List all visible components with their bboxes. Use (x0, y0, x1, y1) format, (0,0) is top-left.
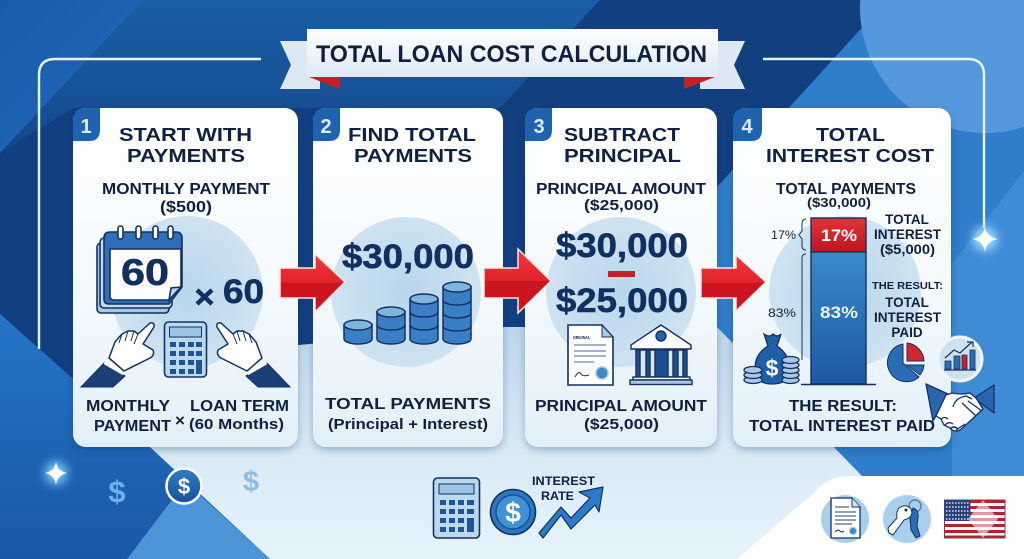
icon: pie chart (888, 343, 924, 382)
formula: LOAN TERM (190, 398, 289, 415)
heading 4: TOTAL (816, 124, 885, 145)
total payments label: TOTAL PAYMENTS (325, 396, 491, 413)
icon: keys (883, 495, 931, 543)
principal amount label: PRINCIPAL AMOUNT (535, 398, 708, 415)
icon: calendar: 60 (121, 252, 169, 293)
heading 4: INTEREST COST (766, 145, 935, 166)
result text: THE RESULT: (789, 398, 897, 415)
heading 4 (766, 124, 935, 166)
stacked bar: 83% (820, 303, 858, 322)
icon: bank (630, 325, 692, 384)
formula: (60 Months) (189, 416, 284, 433)
heading 2 (348, 124, 476, 166)
badge 4 (733, 108, 762, 141)
principal label: ($25,000) (584, 197, 659, 214)
formula: MONTHLY (86, 398, 171, 415)
stacked bar (768, 218, 876, 384)
badge 2: 2 (320, 116, 332, 138)
sparkle right (972, 227, 998, 252)
panel: step 4 (733, 108, 951, 447)
frame line right (763, 59, 984, 228)
result side label: TOTAL (885, 295, 929, 310)
principal amount label: ($25,000) (584, 416, 659, 433)
icon: document (568, 325, 613, 385)
monthly payment label: MONTHLY PAYMENT (102, 181, 271, 198)
icon: bottom coin (490, 490, 536, 534)
total interest label: ($5,000) (880, 242, 935, 257)
times 60 (197, 273, 264, 311)
icon: left hand (81, 323, 154, 387)
result side label: PAID (891, 325, 923, 340)
icon: calculator (164, 322, 206, 377)
interest rate arrow: RATE (541, 489, 574, 503)
heading 1: PAYMENTS (127, 145, 245, 166)
badge 1: 1 (80, 116, 92, 138)
badge 4: 4 (741, 116, 753, 138)
panel: step 3 (525, 108, 717, 447)
heading 1: START WITH (119, 124, 252, 145)
icon: document: ORIGINAL (573, 335, 590, 340)
badge 3: 3 (533, 116, 545, 138)
result side label: INTEREST (874, 310, 942, 325)
monthly payment label: ($500) (160, 199, 212, 216)
panel: step 2 (313, 108, 503, 447)
total interest label: TOTAL (885, 212, 929, 227)
arrow 3 (701, 255, 766, 311)
badge 1 (73, 108, 100, 141)
times 60: 60 (223, 273, 264, 311)
dollar sign pale: $ (243, 466, 259, 498)
heading 1 (119, 124, 252, 166)
subtraction: $30,000 (556, 227, 688, 265)
dollar coin: $ (178, 474, 190, 499)
total payments: ($30,000) (807, 195, 871, 210)
heading 2: FIND TOTAL (348, 124, 476, 145)
title banner (280, 29, 745, 89)
subtraction (556, 227, 688, 320)
heading 3: PRINCIPAL (564, 145, 681, 166)
total interest label: INTEREST (874, 227, 942, 242)
icon: calendar (97, 226, 182, 313)
icon: US flag (944, 500, 1005, 538)
principal amount label (535, 398, 708, 433)
total interest label (874, 212, 942, 257)
heading 3 (564, 124, 681, 166)
total payments: TOTAL PAYMENTS (776, 181, 916, 198)
icon: bottom calculator (434, 478, 480, 538)
icon: money bag (744, 334, 799, 384)
dollar coin (166, 468, 202, 504)
formula: PAYMENT (94, 418, 172, 435)
badge 2 (313, 108, 340, 141)
total payments label: (Principal + Interest) (328, 416, 488, 433)
heading 2: PAYMENTS (354, 145, 472, 166)
icon: coin stacks (344, 282, 471, 344)
dollar sign blue: $ (108, 474, 126, 509)
icon: growth chart badge (938, 337, 982, 381)
icon: handshake (926, 384, 994, 431)
subtraction: $25,000 (556, 282, 688, 320)
title text: TOTAL LOAN COST CALCULATION (316, 41, 707, 68)
stacked bar: 17% (821, 226, 857, 245)
total amount: $30,000 (342, 238, 474, 276)
formula: × (175, 411, 185, 430)
icon: money bag: $ (766, 355, 779, 381)
interest rate arrow (532, 474, 603, 538)
interest rate arrow: INTEREST (532, 474, 596, 488)
icon: bottom coin: $ (505, 497, 521, 528)
arrow 1 (280, 254, 345, 312)
total payments label (325, 396, 491, 433)
frame line left (39, 59, 261, 349)
result text: TOTAL INTEREST PAID (749, 418, 935, 435)
badge 3 (525, 108, 552, 141)
monthly payment label (102, 181, 271, 216)
stacked bar: 83% (768, 306, 796, 320)
result side label (872, 280, 943, 340)
principal label: PRINCIPAL AMOUNT (536, 181, 707, 198)
sparkle left (45, 462, 67, 485)
heading 3: SUBTRACT (564, 124, 681, 145)
panel: step 1 (73, 108, 298, 447)
principal label (536, 181, 707, 214)
total payments (776, 181, 916, 210)
arrow 2 (484, 249, 551, 313)
icon: right hand (217, 323, 290, 387)
result text (749, 398, 935, 435)
result side label: THE RESULT: (872, 280, 943, 292)
formula (86, 398, 289, 435)
stacked bar: 17% (771, 228, 796, 242)
icon: contract (821, 495, 869, 543)
